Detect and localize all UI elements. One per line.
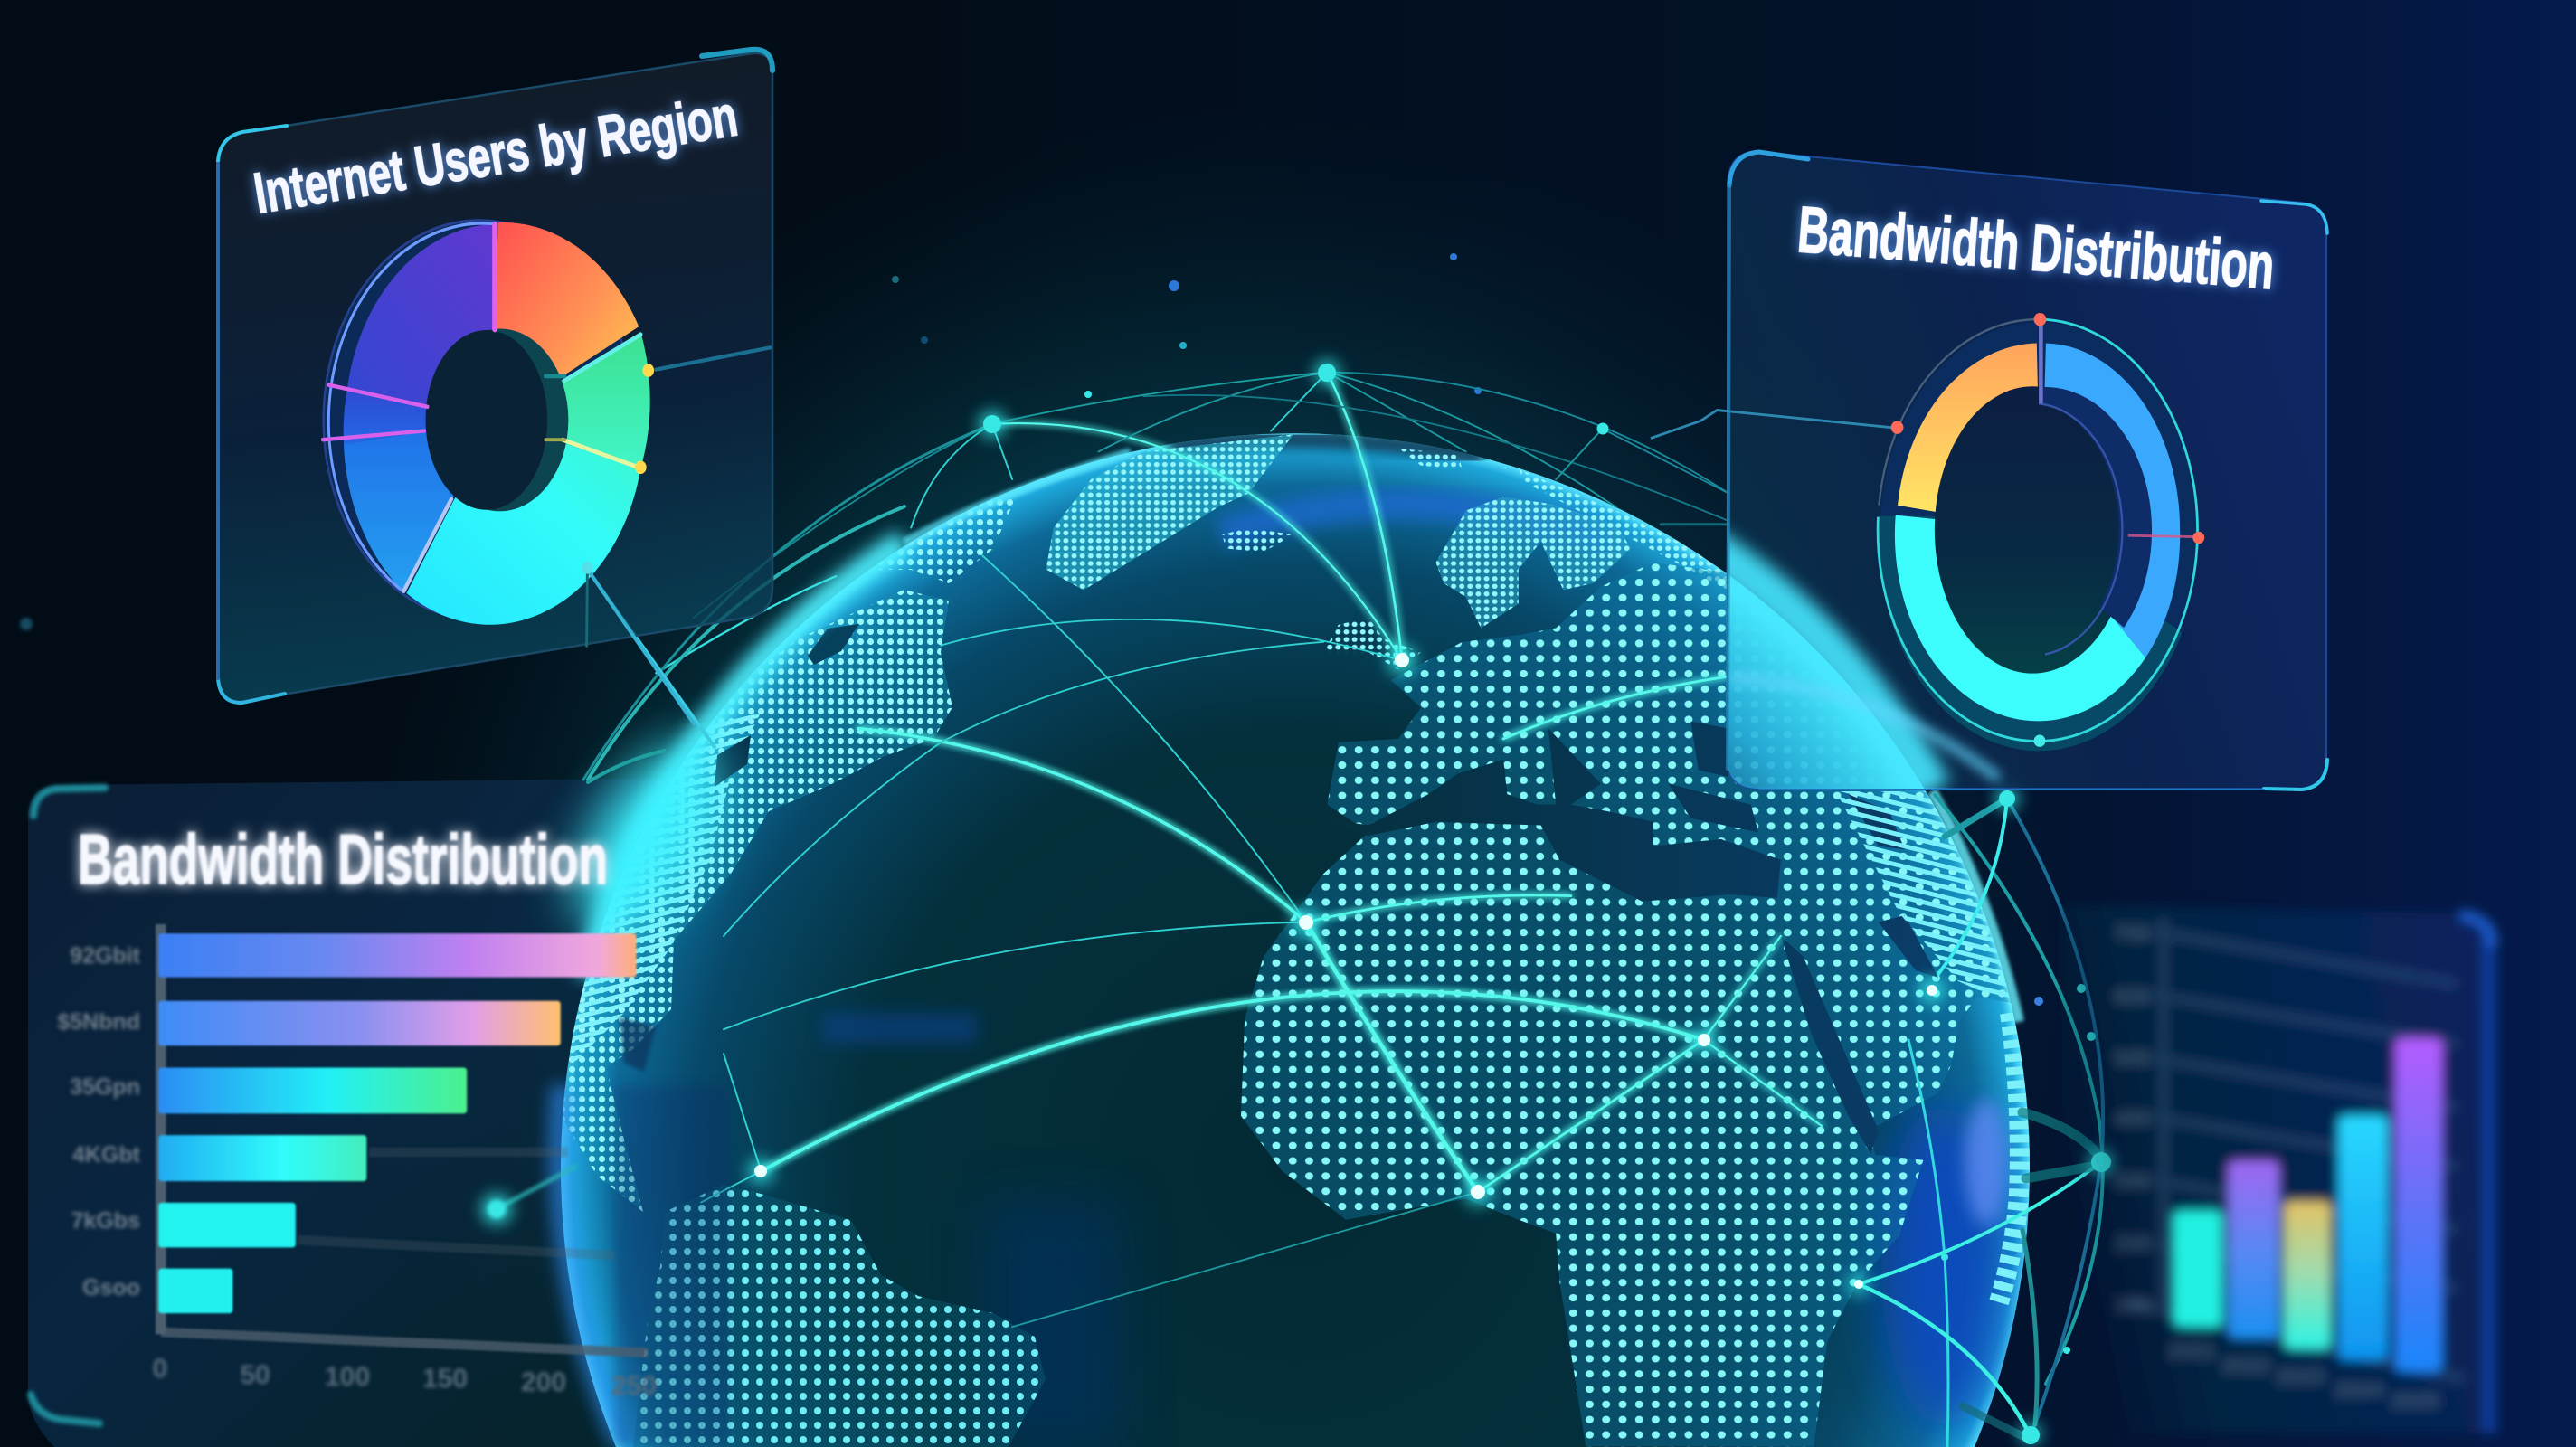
y axis labels: 300 bbox=[2114, 1169, 2150, 1194]
donut chart bbox=[323, 221, 771, 724]
x axis labels: 2024 bbox=[2334, 1378, 2383, 1403]
panel title: Bandwidth Distribution bbox=[78, 819, 608, 899]
hole bbox=[425, 330, 547, 510]
bright arcs bbox=[761, 372, 1822, 1192]
limb glow arctic bbox=[904, 452, 1131, 543]
top limb shade bbox=[1167, 439, 1483, 457]
horizontal marker bbox=[2128, 535, 2197, 537]
network arcs bbox=[497, 372, 2103, 1447]
bar labels: $5Nbnd bbox=[57, 1009, 140, 1035]
x axis labels: 2025 bbox=[2391, 1389, 2439, 1414]
x axis ticks: 100 bbox=[325, 1362, 370, 1392]
limb glow bottom left bbox=[560, 1085, 624, 1447]
inner thin arc bbox=[2039, 403, 2122, 655]
panel glass bbox=[2062, 904, 2494, 1433]
bright limb patch bbox=[549, 722, 744, 951]
y axis labels: 200 bbox=[2114, 1232, 2150, 1256]
connector dots bbox=[635, 364, 654, 474]
center hole bbox=[1935, 386, 2131, 674]
globe bbox=[543, 433, 2030, 1447]
grid lines bbox=[2126, 918, 2465, 1379]
panel glass bbox=[1728, 152, 2326, 789]
faded thick spokes bbox=[2022, 1112, 2095, 1151]
bright arcs to east node bbox=[1938, 799, 2007, 974]
x axis ticks: 200 bbox=[521, 1367, 566, 1397]
outer teal arc bbox=[1935, 795, 2103, 1384]
y axis labels bbox=[2114, 922, 2150, 1318]
panel right edge bbox=[2482, 932, 2496, 1433]
arcs over europe and africa bbox=[656, 372, 1822, 1327]
bright nodes halo bbox=[482, 361, 2113, 1443]
teal vertical curve bbox=[2022, 1230, 2037, 1424]
segment: orange bbox=[1898, 343, 2041, 530]
y axis labels: 600 bbox=[2114, 985, 2150, 1009]
east limb dotted strip bbox=[1999, 1013, 2020, 1302]
slice: blue bbox=[344, 421, 494, 591]
south america bbox=[633, 1185, 1046, 1447]
limb light through glass bbox=[561, 433, 2030, 1447]
x axis ticks bbox=[153, 1354, 657, 1401]
x axis labels: 2022 bbox=[2221, 1354, 2270, 1378]
y axis labels: 700 bbox=[2114, 922, 2150, 946]
limb wash bbox=[561, 433, 2030, 1447]
inner navy band bbox=[2039, 387, 2152, 628]
slice: cyan bbox=[406, 421, 640, 625]
ring chart bbox=[1651, 313, 2204, 751]
light streak bbox=[1731, 678, 1999, 779]
globe sphere bbox=[561, 433, 2030, 1447]
inner atmospheric arc bbox=[1221, 504, 1610, 543]
x axis ticks: 0 bbox=[153, 1354, 167, 1384]
background particles bbox=[20, 253, 2043, 1006]
afro-eurasia bbox=[1241, 563, 2015, 1447]
panel corner accents bbox=[218, 50, 772, 703]
x axis ticks: 50 bbox=[240, 1360, 270, 1390]
greenland bbox=[1046, 434, 1293, 590]
panel corner accent bbox=[2465, 915, 2492, 942]
outer blue arc bbox=[2007, 799, 2103, 1436]
mid ocean blue patch bbox=[823, 1013, 977, 1044]
x axis ticks: 250 bbox=[611, 1371, 657, 1401]
south atlantic dark patch bbox=[986, 1203, 1122, 1447]
outer ring cyan bbox=[1878, 319, 2198, 742]
panel: blurred column chart bbox=[2062, 904, 2494, 1433]
panel glass bbox=[218, 53, 772, 702]
east limb stripes bbox=[1836, 791, 2019, 1008]
panel: bandwidth distribution donut bbox=[561, 152, 2327, 1447]
bars bbox=[2173, 1038, 2442, 1372]
panel: internet users by region bbox=[218, 50, 772, 724]
x axis labels: 2023 bbox=[2276, 1365, 2325, 1389]
arcs around the right limb bbox=[1859, 795, 2103, 1447]
slice: orange bbox=[494, 222, 639, 421]
segment: blue bbox=[2041, 343, 2180, 657]
outer left highlight bbox=[328, 223, 494, 591]
panel corner accents bbox=[1728, 152, 2327, 790]
back ring bbox=[324, 221, 634, 619]
slice: green bbox=[494, 332, 650, 468]
y axis labels: 100 bbox=[2114, 1293, 2150, 1318]
outer ring grey bbox=[1879, 319, 2040, 506]
connector line bbox=[1651, 411, 1891, 439]
bright blue ocean highlight bbox=[1965, 1099, 2008, 1225]
svalbard bbox=[1398, 449, 1463, 469]
british isles bbox=[1323, 618, 1421, 669]
greenland, iceland, uk, scandinavia, africa, eurasia bbox=[1046, 434, 2015, 1447]
cyan marker dot bbox=[2034, 735, 2045, 747]
glass dimming over globe bbox=[615, 1085, 729, 1447]
dark track bbox=[1880, 322, 2197, 741]
bar labels: Gsoo bbox=[82, 1275, 140, 1300]
limb glow east bbox=[1932, 791, 2019, 1022]
top divider bbox=[2036, 322, 2045, 403]
iceland bbox=[1222, 528, 1293, 552]
slice: indigo bbox=[344, 387, 494, 444]
bar labels: 4KGbt bbox=[72, 1142, 141, 1168]
glass left edge glow bbox=[1726, 561, 1733, 769]
bar labels bbox=[57, 943, 141, 1300]
lower right blue ocean bbox=[1881, 1103, 2008, 1429]
teal nodes bbox=[488, 364, 2111, 1444]
limb bloom bbox=[1628, 508, 1932, 791]
bar labels: 35Gpn bbox=[70, 1074, 140, 1100]
x axis ticks: 150 bbox=[422, 1364, 468, 1394]
mediterranean and inland seas bbox=[1323, 722, 1938, 1154]
panel right edge bbox=[727, 913, 731, 1447]
panel glass: bar chart backing bbox=[28, 778, 729, 1447]
axes bbox=[161, 924, 649, 1353]
node cores bbox=[754, 653, 1937, 1289]
scandinavia bbox=[1436, 469, 1728, 629]
dotted continents bbox=[543, 434, 2020, 1447]
limb glow top left bbox=[588, 543, 904, 977]
horizontal bar chart bbox=[158, 924, 649, 1353]
hole depth bbox=[431, 328, 568, 511]
bar labels: 7kGbs bbox=[71, 1208, 140, 1234]
panel: bandwidth bar chart bbox=[31, 788, 729, 1447]
network nodes bbox=[482, 361, 2113, 1444]
panel corner accents bbox=[31, 788, 105, 1423]
segment: cyan bbox=[1895, 515, 2145, 721]
bar labels: 92Gbit bbox=[70, 943, 141, 969]
panel title: Internet Users by Region bbox=[250, 82, 742, 226]
x axis labels: 2021 bbox=[2167, 1339, 2216, 1364]
thin arcs bbox=[656, 372, 1728, 1327]
north america bbox=[543, 497, 1016, 1212]
bars bbox=[158, 933, 636, 1313]
x axis labels bbox=[2167, 1339, 2439, 1414]
connector lines bbox=[587, 347, 771, 724]
slice: purple bbox=[347, 224, 494, 421]
red marker dots bbox=[1891, 313, 2204, 544]
y axis labels: 500 bbox=[2114, 1046, 2150, 1071]
inner vertical arc bbox=[1908, 1040, 1948, 1447]
left outer arcs bbox=[497, 424, 992, 1209]
panel title: Bandwidth Distribution bbox=[1795, 194, 2277, 303]
y axis labels: 400 bbox=[2114, 1107, 2150, 1131]
slice separators bbox=[323, 225, 640, 591]
